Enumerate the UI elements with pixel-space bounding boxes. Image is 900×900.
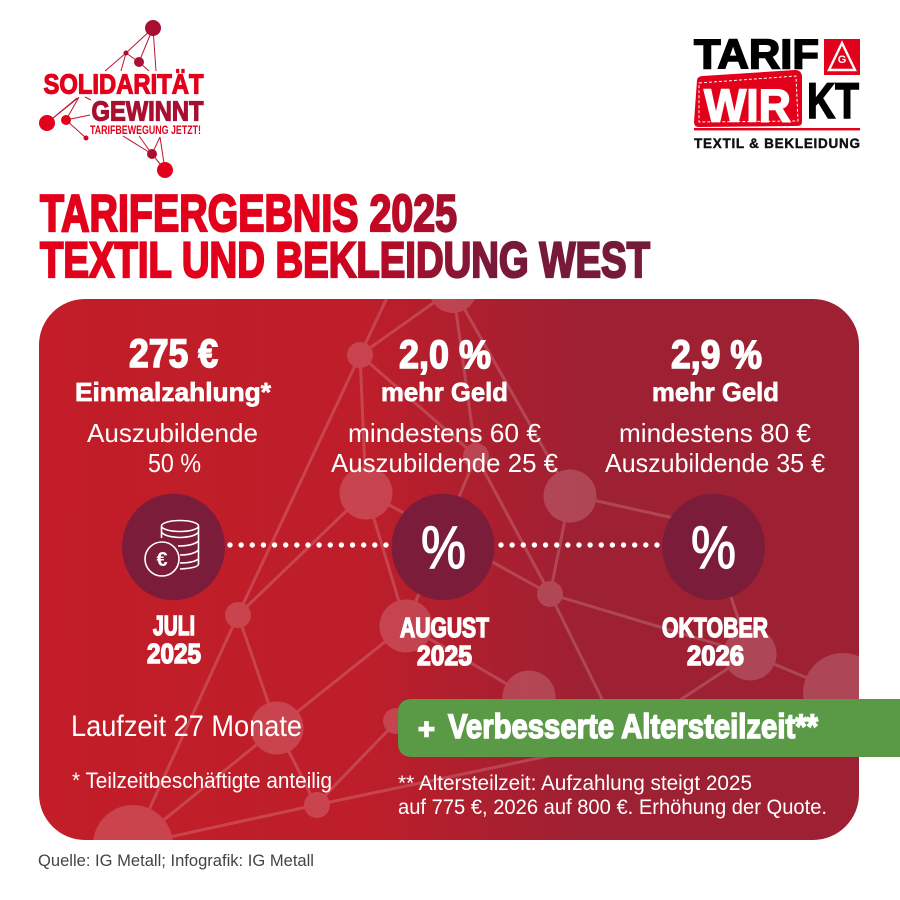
logo: Tarif wirkt: TARIF [694,30,819,78]
logo: Tarif wirkt [694,30,860,151]
column 3: 2.9 percent [605,333,826,478]
footnote: partial retirement: auf 775 €, 2026 auf 800 €. Erhöhung der Quote. [398,796,827,819]
icon: percent October [662,494,765,600]
term note: Laufzeit 27 Monate [71,710,302,743]
column 1: one-off payment: Auszubildende [87,418,258,448]
green banner: + [418,714,435,746]
title [40,185,650,288]
column 1: one-off payment: 275 € [129,332,218,376]
title: TEXTIL UND BEKLEIDUNG WEST [40,232,650,288]
logo: Solidarität gewinnt: SOLIDARITÄT [44,68,204,100]
footnote: part-time: * Teilzeitbeschäftigte anteilig [72,768,332,793]
icon: coins: € [156,549,168,571]
logo: Solidarität gewinnt: TARIFBEWEGUNG JETZT! [90,125,201,137]
column 1: one-off payment [75,332,272,478]
icon: coins [122,494,225,600]
logo: Solidarität gewinnt [39,20,204,178]
logo: Tarif wirkt: WIR [704,80,791,132]
panel: main red card [39,299,859,840]
column 2: 2.0 percent: Auszubildende 25 € [331,448,559,478]
column 2: 2.0 percent: 2,0 % [399,333,491,377]
logo: Solidarität gewinnt: GEWINNT [92,96,204,126]
date: October 2026: OKTOBER [662,612,768,643]
column 1: one-off payment: 50 % [148,448,201,478]
date: August 2025: AUGUST [400,612,489,643]
icon: percent August [392,494,494,600]
column 3: 2.9 percent: 2,9 % [671,333,762,377]
date: October 2026 [662,612,768,671]
column 3: 2.9 percent: Auszubildende 35 € [605,448,826,478]
icon: percent August: % [421,514,466,581]
column 2: 2.0 percent: mehr Geld [381,377,508,407]
title: TARIFERGEBNIS 2025 [40,185,457,243]
date: July 2025: 2025 [147,638,201,669]
column 3: 2.9 percent: mindestens 80 € [619,418,812,448]
column 2: 2.0 percent: mindestens 60 € [348,418,542,448]
logo: Tarif wirkt: G [838,54,846,66]
footnote: partial retirement [398,772,827,819]
column 2: 2.0 percent [331,333,559,478]
icon: percent October: % [691,514,736,581]
date: July 2025: JULI [153,610,195,641]
logo: Tarif wirkt: KT [807,73,859,129]
column 3: 2.9 percent: mehr Geld [652,377,779,407]
date: August 2025: 2025 [417,640,472,671]
date: July 2025 [147,610,201,669]
footnote: partial retirement: ** Altersteilzeit: Aufzahlung steigt 2025 [398,772,752,795]
green banner [398,699,900,757]
date: August 2025 [400,612,489,671]
source: Quelle: IG Metall; Infografik: IG Metall [38,851,314,870]
logo: Tarif wirkt: TEXTIL & BEKLEIDUNG [694,136,860,151]
column 1: one-off payment: Einmalzahlung* [75,377,272,407]
timeline dots [230,542,657,548]
date: October 2026: 2026 [687,640,744,671]
green banner: Verbesserte Altersteilzeit** [448,708,819,746]
